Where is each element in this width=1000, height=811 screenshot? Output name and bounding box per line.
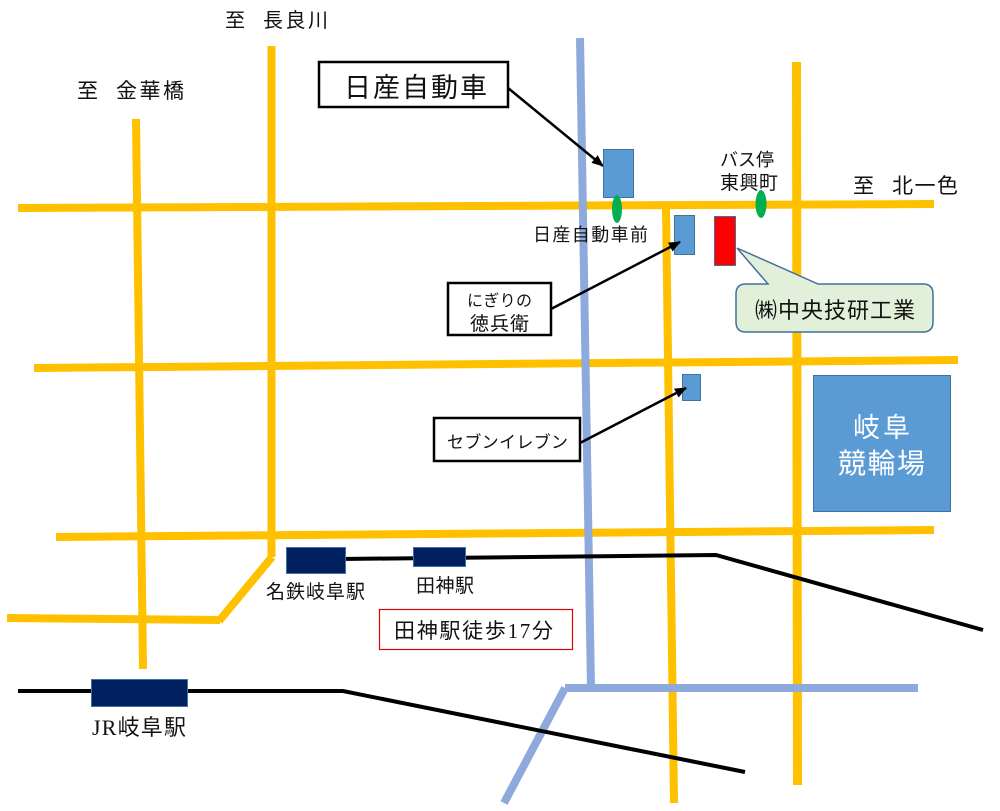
arrow: Nissan to building xyxy=(508,88,603,166)
label box: Tokubei: にぎりの xyxy=(467,292,532,310)
direction label: Kitaisshiki: 至 xyxy=(853,174,879,198)
label box: Nissan xyxy=(319,62,508,107)
label box: Tokubei: 徳兵衛 xyxy=(470,313,529,335)
callout: Chuo Giken Kogyo xyxy=(736,248,933,332)
building: Tokubei xyxy=(674,216,694,254)
bus stop marker: Nissan-mae xyxy=(612,195,622,223)
station: Tagami: 田神駅 xyxy=(416,575,474,597)
callout: walking time: 田神駅徒歩17分 xyxy=(394,619,553,643)
building: Gifu Keirinjo: 岐阜 xyxy=(853,413,910,443)
direction label: Kinkabashi: 至 xyxy=(77,79,103,103)
arrow: Tokubei xyxy=(551,242,680,309)
callout: walking time xyxy=(380,610,572,650)
station: JR Gifu xyxy=(92,680,188,740)
station: JR Gifu: JR岐阜駅 xyxy=(92,715,186,740)
label box: Nissan: 日産自動車 xyxy=(344,73,487,103)
direction label: Nagara river: 至 xyxy=(225,10,250,32)
label box: Seven-Eleven: セブンイレブン xyxy=(447,432,568,452)
bus stop label: Nissan-mae: 日産自動車前 xyxy=(533,225,648,245)
bus stop label: Higashi-Komachi: 東興町 xyxy=(720,172,778,194)
direction label: Kinkabashi: 金華橋 xyxy=(116,79,184,103)
arrow: Seven-Eleven xyxy=(580,388,686,443)
callout: Chuo Giken Kogyo: ㈱中央技研工業 xyxy=(755,298,915,323)
station: Tagami xyxy=(414,548,474,597)
station: Meitetsu Gifu xyxy=(266,548,365,603)
railway: JR line xyxy=(18,691,745,772)
label box: Tokubei xyxy=(448,283,551,335)
building: Seven-Eleven xyxy=(682,374,700,400)
building: Gifu Keirinjo xyxy=(814,376,950,512)
building: Gifu Keirinjo: 競輪場 xyxy=(838,448,925,480)
river and canal: blue lines xyxy=(504,38,918,803)
railway: Meitetsu line xyxy=(340,555,983,630)
station: Meitetsu Gifu: 名鉄岐阜駅 xyxy=(266,581,365,603)
label box: Seven-Eleven xyxy=(434,418,580,461)
building: Chuo Giken xyxy=(714,216,736,266)
bus stop label: Higashi-Komachi xyxy=(720,150,778,194)
direction label: Nagara river: 長良川 xyxy=(263,9,328,32)
bus stop label: Higashi-Komachi: バス停 xyxy=(720,150,774,170)
bus stop marker: Higashi-Komachi xyxy=(756,190,766,218)
building: Nissan xyxy=(604,150,634,198)
direction label: Kitaisshiki: 北一色 xyxy=(892,174,958,198)
